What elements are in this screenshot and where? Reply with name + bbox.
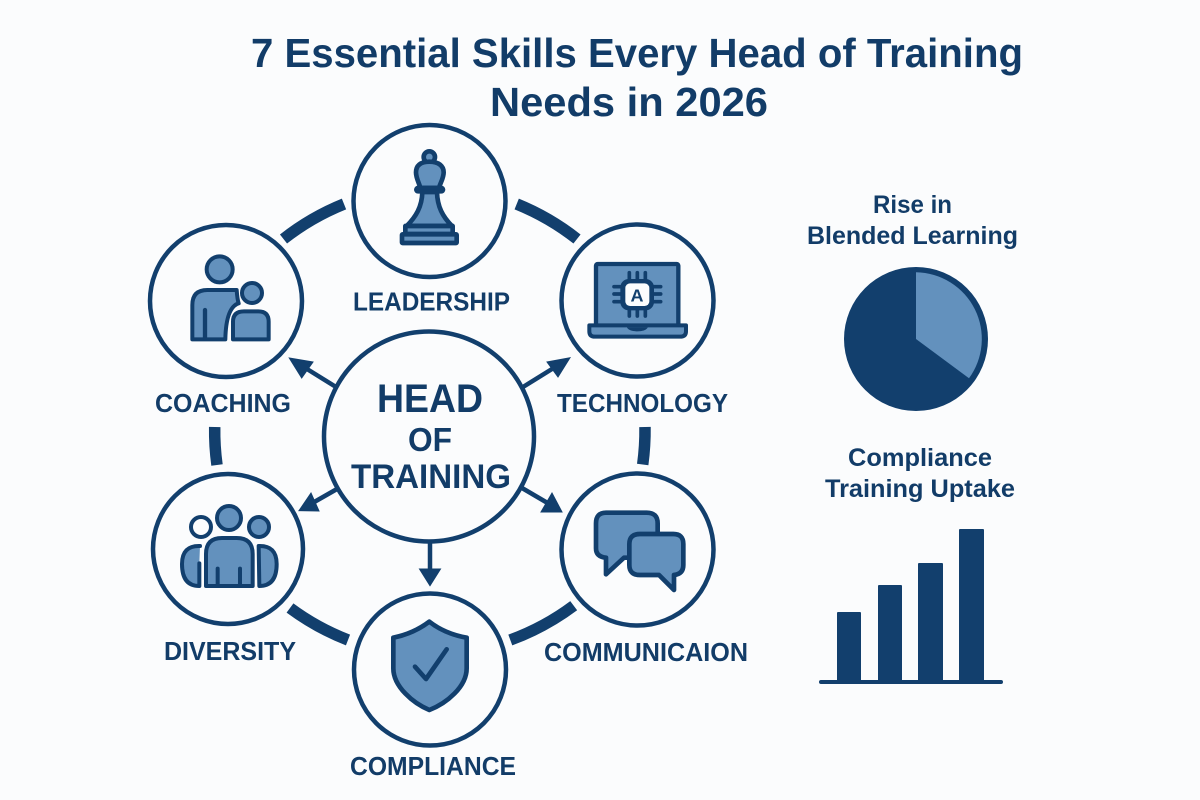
panel: central hub: OF [408, 421, 452, 458]
panel: central hub [324, 332, 534, 542]
panel: communication: COMMUNICAION [544, 637, 748, 667]
title: Needs in 2026 [490, 79, 768, 125]
panel: communication [544, 474, 748, 667]
panel: technology [557, 224, 728, 418]
icon: laptop with AI chip [589, 264, 686, 337]
icon: coach and learner [192, 256, 269, 339]
title: 7 Essential Skills Every Head of Training [251, 30, 1023, 76]
heading: rise in blended learning [807, 191, 1018, 250]
panel: central hub: TRAINING [351, 458, 511, 496]
bar chart [819, 529, 1003, 684]
panel: diversity: DIVERSITY [164, 636, 296, 666]
ring connector arcs [215, 204, 645, 640]
heading: compliance training uptake [825, 444, 1015, 503]
panel: coaching: COACHING [155, 388, 291, 418]
panel: compliance: COMPLIANCE [350, 751, 516, 781]
heading: rise in blended learning: Blended Learning [807, 222, 1018, 250]
panel: coaching [150, 225, 302, 418]
panel: compliance [350, 594, 516, 781]
heading: rise in blended learning: Rise in [873, 191, 952, 219]
icon: group of people [182, 506, 277, 586]
heading: compliance training uptake: Training Uptake [825, 475, 1015, 503]
panel: central hub: HEAD [377, 377, 483, 421]
panel: leadership: LEADERSHIP [353, 286, 510, 316]
icon: chess piece [402, 151, 457, 243]
title [251, 30, 1023, 125]
icon: speech bubbles [596, 513, 683, 590]
icon: shield with check [393, 622, 467, 710]
panel: technology: TECHNOLOGY [557, 388, 728, 418]
heading: compliance training uptake: Compliance [848, 444, 992, 472]
icon: laptop with AI chip: A [630, 286, 643, 306]
arrows from hub to skills [289, 358, 570, 586]
panel: leadership [353, 125, 510, 316]
panel: diversity [153, 474, 303, 666]
pie chart [844, 267, 988, 411]
